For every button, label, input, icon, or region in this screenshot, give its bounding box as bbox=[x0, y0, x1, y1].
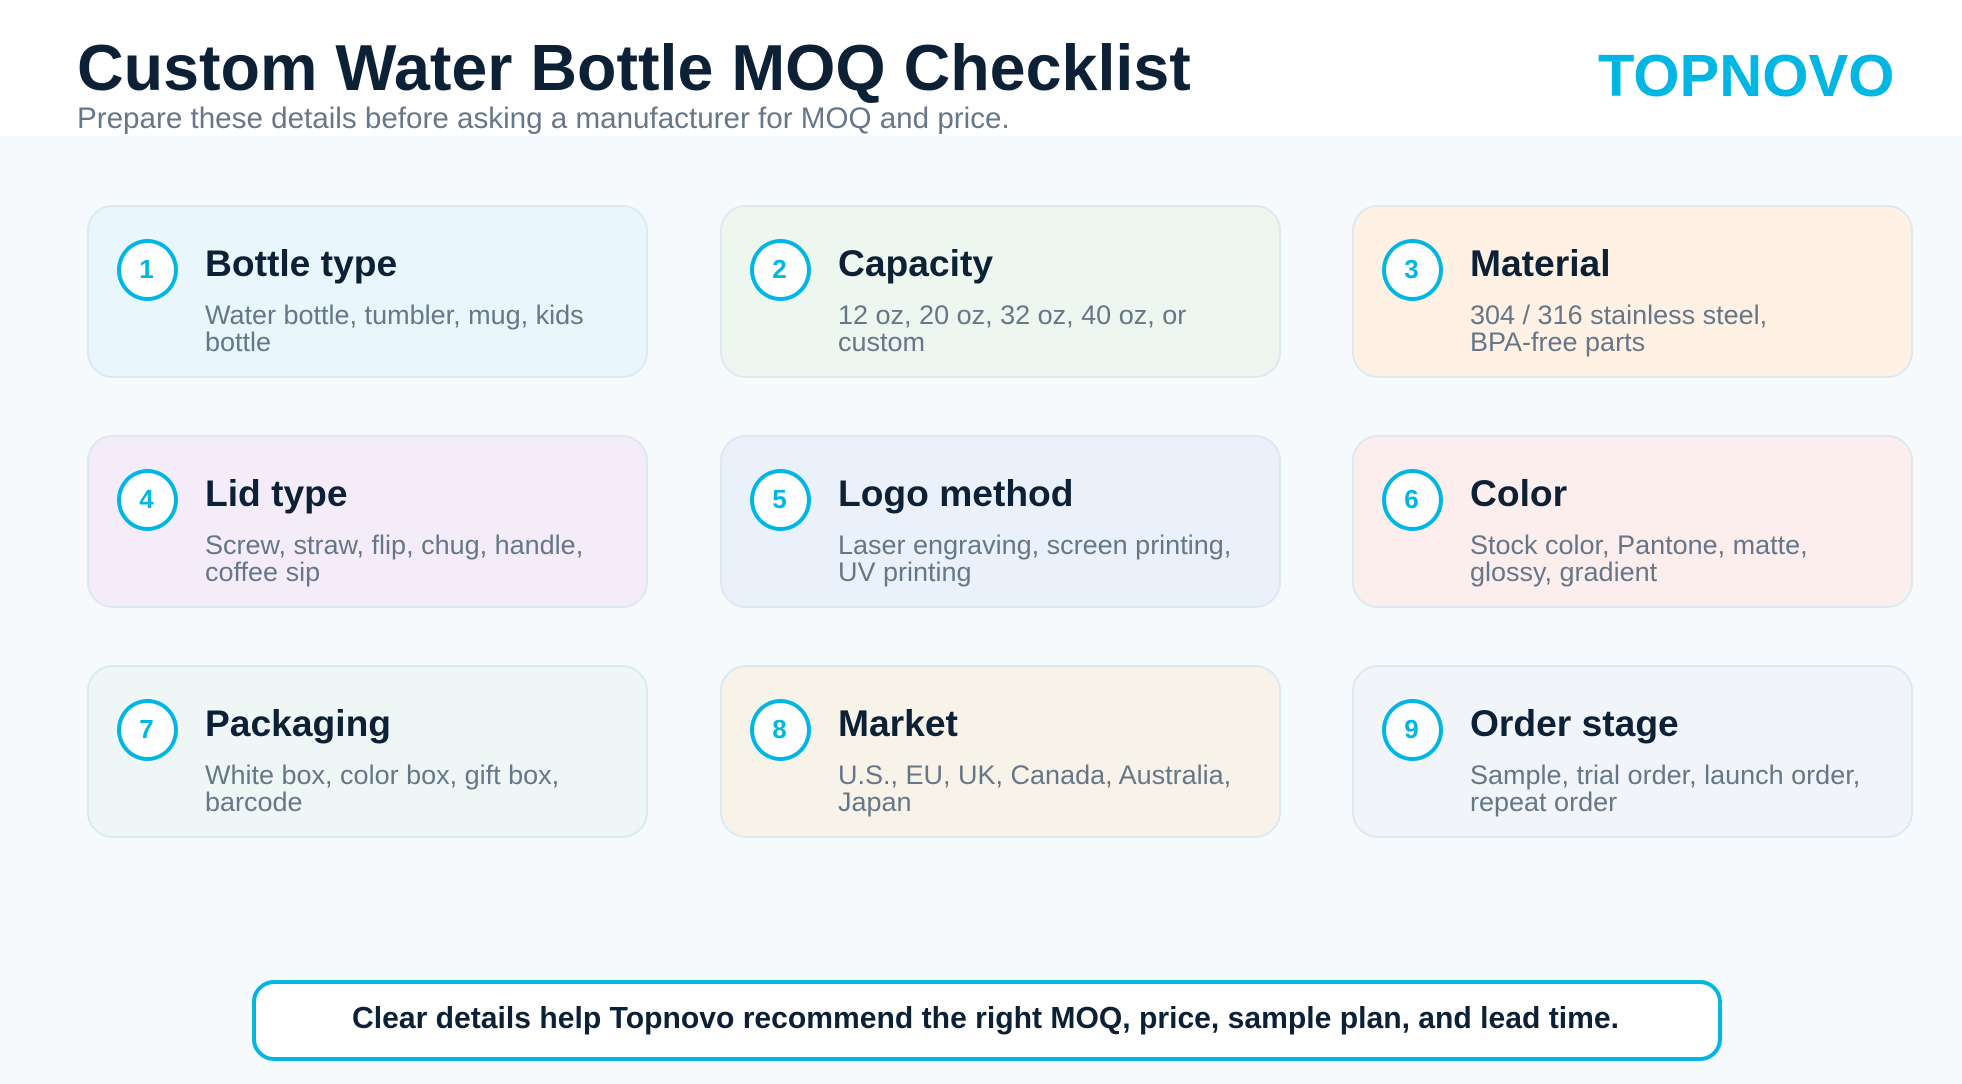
panel: 7 Packaging bbox=[87, 665, 648, 838]
text: Order stage details: Sample, trial order, launch order, bbox=[1470, 760, 1860, 790]
text: Packaging details: barcode bbox=[205, 786, 303, 816]
text: Order stage details bbox=[1470, 760, 1860, 816]
number badge 3 bbox=[1382, 238, 1443, 300]
text: Bottle type details bbox=[205, 300, 584, 356]
panel: 2 Capacity bbox=[720, 205, 1281, 378]
text: Material details: BPA-free parts bbox=[1470, 326, 1645, 356]
text: Capacity details: custom bbox=[838, 326, 925, 356]
text: Capacity details: 12 oz, 20 oz, 32 oz, 40 oz, or bbox=[838, 300, 1186, 330]
text: Packaging details: White box, color box, gift box, bbox=[205, 760, 559, 790]
number badge 8: 8 bbox=[772, 714, 787, 744]
text: Color details bbox=[1470, 530, 1808, 586]
panel: 5 Logo method bbox=[720, 435, 1281, 608]
number badge 4 bbox=[117, 468, 178, 530]
text: Lid type details: Screw, straw, flip, chug, handle, bbox=[205, 530, 583, 560]
panel: 9 Order stage bbox=[1352, 665, 1913, 838]
callout: footer message bbox=[252, 980, 1722, 1061]
number badge 5 bbox=[750, 468, 811, 530]
text: Logo method details: UV printing bbox=[838, 556, 972, 586]
text: Order stage details: repeat order bbox=[1470, 786, 1617, 816]
text: Capacity details bbox=[838, 300, 1186, 356]
text: Color details: Stock color, Pantone, matte, bbox=[1470, 530, 1808, 560]
number badge 3: 3 bbox=[1404, 254, 1419, 284]
text: Logo method details bbox=[838, 530, 1231, 586]
text: Bottle type details: Water bottle, tumbler, mug, kids bbox=[205, 300, 584, 330]
number badge 2 bbox=[750, 238, 811, 300]
number badge 8 bbox=[750, 698, 811, 760]
text: Logo method details: Laser engraving, screen printing, bbox=[838, 530, 1231, 560]
number badge 1: 1 bbox=[139, 254, 154, 284]
number badge 4: 4 bbox=[139, 484, 154, 514]
heading: Logo method: Logo method bbox=[838, 472, 1073, 514]
text: Market details: Japan bbox=[838, 786, 912, 816]
heading: Order stage: Order stage bbox=[1470, 702, 1679, 744]
text: Lid type details: coffee sip bbox=[205, 556, 320, 586]
heading: Bottle type: Bottle type bbox=[205, 242, 397, 284]
text: Packaging details bbox=[205, 760, 559, 816]
number badge 2: 2 bbox=[772, 254, 787, 284]
text: Lid type details bbox=[205, 530, 583, 586]
number badge 9 bbox=[1382, 698, 1443, 760]
heading: Material: Material bbox=[1470, 242, 1611, 284]
title: Custom Water Bottle MOQ Checklist bbox=[77, 32, 1191, 104]
panel: 4 Lid type bbox=[87, 435, 648, 608]
number badge 7: 7 bbox=[139, 714, 154, 744]
text: Market details bbox=[838, 760, 1231, 816]
text: Material details bbox=[1470, 300, 1767, 356]
number badge 9: 9 bbox=[1404, 714, 1419, 744]
panel: 8 Market bbox=[720, 665, 1281, 838]
text: Bottle type details: bottle bbox=[205, 326, 271, 356]
heading: Lid type: Lid type bbox=[205, 472, 348, 514]
number badge 6: 6 bbox=[1404, 484, 1419, 514]
heading: Packaging: Packaging bbox=[205, 702, 391, 744]
number badge 6 bbox=[1382, 468, 1443, 530]
heading: Color: Color bbox=[1470, 472, 1567, 514]
panel: 1 Bottle type bbox=[87, 205, 648, 378]
number badge 1 bbox=[117, 238, 178, 300]
logo: TOPNOVO: TOPNOVO bbox=[1598, 42, 1894, 109]
text: Material details: 304 / 316 stainless steel, bbox=[1470, 300, 1767, 330]
text: Market details: U.S., EU, UK, Canada, Australia, bbox=[838, 760, 1231, 790]
heading: Capacity: Capacity bbox=[838, 242, 993, 284]
subtitle: Prepare these details before asking a manufacturer for MOQ and price. bbox=[77, 102, 1010, 135]
number badge 7 bbox=[117, 698, 178, 760]
panel: 6 Color bbox=[1352, 435, 1913, 608]
panel: 3 Material bbox=[1352, 205, 1913, 378]
text: Color details: glossy, gradient bbox=[1470, 556, 1657, 586]
number badge 5: 5 bbox=[772, 484, 787, 514]
heading: Market: Market bbox=[838, 702, 958, 744]
header band bbox=[0, 0, 1962, 136]
callout: footer message: Clear details help Topnovo recommend the right MOQ, price, sample plan, and lead time. bbox=[352, 1002, 1619, 1035]
